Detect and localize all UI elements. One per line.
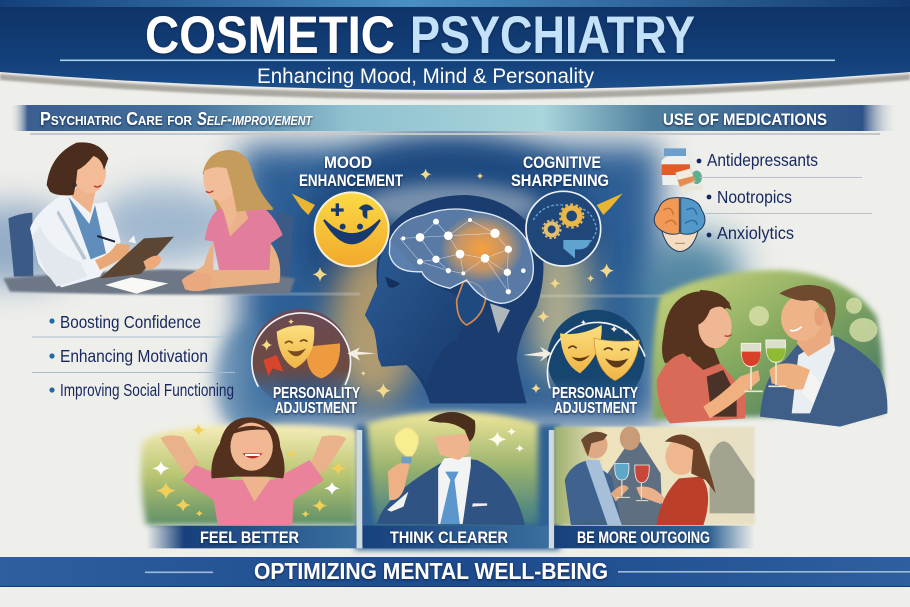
footer band [0, 557, 910, 587]
label band: think clearer [363, 526, 548, 548]
label: personality adjustment right: ADJUSTMENT [554, 400, 637, 417]
panel: think clearer [367, 412, 538, 525]
benefits list [32, 312, 235, 400]
medications list [654, 148, 872, 252]
label: be more outgoing: BE MORE OUTGOING [577, 528, 710, 547]
head silhouette [365, 195, 543, 403]
benefits list: Enhancing Motivation [60, 346, 208, 366]
wine glasses [741, 340, 786, 391]
banner heading: psychiatric care [40, 109, 313, 129]
icon: personality masks right [547, 310, 645, 407]
label: feel better: FEEL BETTER [200, 528, 299, 547]
doctor [30, 142, 130, 287]
label: personality adjustment right: PERSONALITY [552, 385, 638, 402]
clipboard [100, 237, 174, 278]
sparkles [152, 424, 346, 518]
label: cognitive sharpening [511, 153, 609, 190]
label: mood enhancement: ENHANCEMENT [299, 171, 403, 190]
man [760, 285, 887, 427]
banner heading: medications: USE OF MEDICATIONS [663, 110, 827, 129]
header band [0, 0, 910, 100]
subtitle: Enhancing Mood, Mind & Personality [257, 65, 594, 88]
title: PSYCHIATRY [410, 6, 695, 65]
label: personality adjustment right [552, 385, 638, 417]
benefits list: Improving Social Functioning [60, 380, 234, 400]
illustration: doctor and patient [3, 142, 295, 295]
icon: cognitive gears [526, 191, 623, 266]
icon: pill bottle [661, 148, 703, 192]
icon: brain and face [654, 198, 705, 252]
title: COSMETIC [145, 6, 395, 65]
medications list: Anxiolytics [717, 223, 794, 243]
label: personality adjustment left: ADJUSTMENT [275, 400, 357, 417]
label: think clearer: THINK CLEARER [390, 528, 508, 547]
label: cognitive sharpening: SHARPENING [511, 171, 609, 190]
label: cognitive sharpening: COGNITIVE [523, 153, 601, 172]
illustration: couple toasting [652, 270, 887, 427]
label: personality adjustment left: PERSONALITY [273, 385, 360, 402]
paper sheet [105, 277, 168, 294]
label: mood enhancement: MOOD [324, 153, 372, 172]
panel: feel better [122, 417, 362, 548]
label: mood enhancement [299, 153, 403, 190]
banner heading: psychiatric care: Psychiatric Care for [40, 109, 193, 129]
title [145, 6, 695, 65]
icon: mood smiley [292, 191, 390, 267]
footer slogan: OPTIMIZING MENTAL WELL-BEING [254, 558, 608, 584]
centre concept group [251, 169, 645, 408]
section banner [10, 105, 898, 135]
arrow: right mask to head [523, 347, 552, 362]
panels row [122, 412, 754, 548]
icon: personality masks left [251, 309, 351, 408]
label: personality adjustment left [273, 385, 360, 417]
label band: be more outgoing [554, 526, 754, 548]
panel: be more outgoing [549, 426, 754, 548]
sparkles [313, 169, 614, 398]
arrow: left mask to head [347, 347, 376, 361]
label band: feel better [146, 526, 357, 548]
patient [182, 150, 283, 291]
woman [657, 290, 760, 423]
brain network [389, 209, 533, 303]
medications list: Nootropics [717, 187, 792, 207]
benefits list: Boosting Confidence [60, 312, 201, 332]
medications list: Antidepressants [707, 150, 818, 170]
banner heading: psychiatric care: Self-improvement [197, 109, 313, 129]
